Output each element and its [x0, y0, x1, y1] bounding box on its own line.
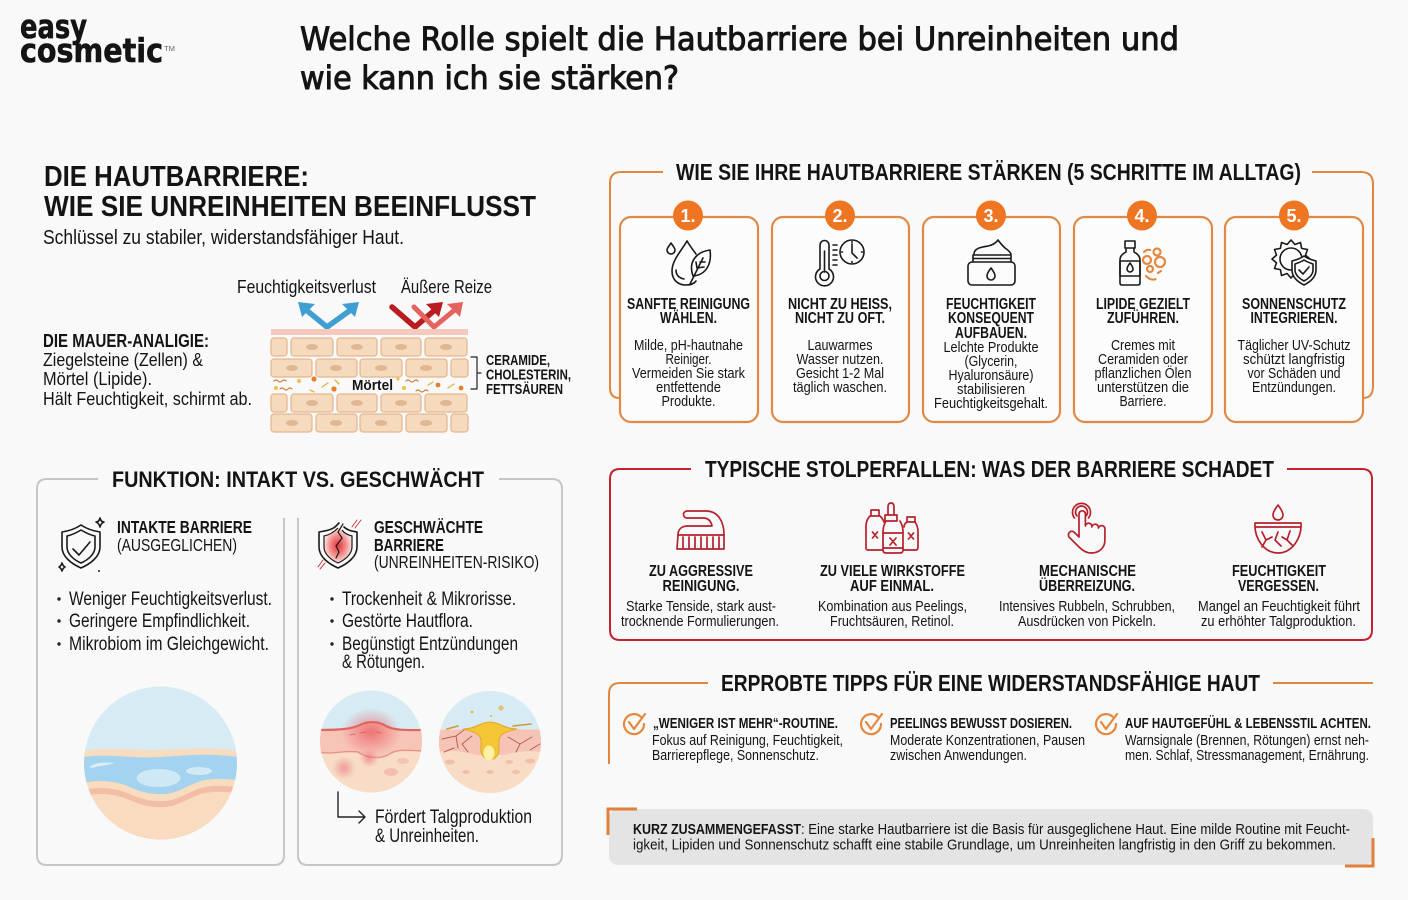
icon: bottles — [866, 503, 918, 553]
callout: kurz zusammengefasst — [608, 809, 1373, 866]
pitfall heading: VERGESSEN. — [1238, 578, 1319, 595]
step text: Ceramiden oder — [1098, 352, 1188, 368]
panel: erprobte tipps — [609, 670, 1373, 764]
icon: check — [624, 714, 645, 734]
icon: check — [1096, 714, 1117, 734]
icon: check — [861, 714, 882, 734]
step heading — [1242, 296, 1346, 327]
title: wie kann ich sie stärken? — [300, 59, 679, 97]
heading: damaged barrier — [374, 517, 539, 572]
pitfall text: Kombination aus Peelings, — [818, 599, 967, 615]
step text: stabilisieren — [957, 382, 1025, 398]
pitfall text: zu erhöhter Talgproduktion. — [1201, 614, 1356, 630]
label: lipids: CHOLESTERIN, — [486, 368, 571, 384]
card: step 1 — [620, 200, 758, 422]
pitfall heading: ZU VIELE WIRKSTOFFE — [820, 563, 965, 580]
icon: damaged shield — [318, 520, 361, 569]
icon: pressing finger — [1068, 503, 1105, 553]
label: lipids: FETTSÄUREN — [486, 381, 563, 398]
step text: Wasser nutzen. — [796, 352, 884, 368]
subtitle: Schlüssel zu stabiler, widerstandsfähiger Haut. — [43, 226, 404, 249]
icon: scrub brush — [677, 511, 724, 549]
text block: mauer-analogie: Hält Feuchtigkeit, schirmt ab. — [43, 388, 252, 409]
pitfall heading — [649, 563, 753, 595]
label: moertel: Mörtel — [352, 377, 393, 394]
logo: easy cosmetic — [20, 7, 175, 70]
panel: funktion intakt vs geschwaecht — [37, 467, 562, 865]
tip text — [890, 716, 1085, 764]
step text: Milde, pH-hautnahe — [634, 338, 743, 354]
step heading: SONNENSCHUTZ — [1242, 296, 1346, 313]
step heading: NICHT ZU HEISS, — [788, 296, 892, 313]
step text: unterstützen die — [1097, 380, 1189, 396]
panel: stolperfallen — [610, 456, 1372, 640]
card: step 3 — [923, 200, 1060, 422]
tip 2 — [861, 714, 1085, 764]
panel heading: WIE SIE IHRE HAUTBARRIERE STÄRKEN (5 SCHRITTE IM ALLTAG) — [676, 159, 1301, 185]
list: intact barrier: Weniger Feuchtigkeitsverlust. — [69, 589, 272, 610]
pitfall 2 — [818, 503, 967, 630]
illustration: sebum plug — [438, 690, 542, 794]
label: lipids: CERAMIDE, — [486, 353, 550, 369]
pitfall 1 — [621, 511, 779, 630]
step heading: SANFTE REINIGUNG — [627, 296, 750, 313]
panel heading: ERPROBTE TIPPS FÜR EINE WIDERSTANDSFÄHIGE HAUT — [721, 670, 1260, 696]
text block: mauer-analogie — [43, 330, 252, 409]
step text: vor Schäden und — [1248, 366, 1340, 382]
text: sebum result — [375, 807, 532, 847]
step text: Feuchtigkeitsgehalt. — [934, 396, 1048, 412]
pitfall text — [999, 599, 1175, 630]
step text — [1238, 338, 1350, 396]
icon: drop and leaf — [667, 241, 710, 285]
pitfall text — [818, 599, 967, 630]
icon: intact shield — [59, 518, 104, 572]
pitfall heading — [1039, 563, 1136, 595]
badge 1 — [673, 200, 703, 230]
panel heading: FUNKTION: INTAKT VS. GESCHWÄCHT — [112, 467, 484, 492]
text block: mauer-analogie: DIE MAUER-ANALIGIE: — [43, 330, 209, 351]
list: damaged barrier — [330, 589, 518, 673]
arrow: to sebum — [338, 792, 365, 823]
pitfall 3 — [999, 503, 1175, 630]
step heading — [788, 296, 892, 327]
title: Welche Rolle spielt die Hautbarriere bei Unreinheiten und — [300, 20, 1179, 58]
card: step 5 — [1225, 200, 1363, 422]
card: step 4 — [1074, 200, 1212, 422]
pitfall text: Mangel an Feuchtigkeit führt — [1198, 599, 1360, 615]
step text — [793, 338, 887, 396]
icon: dry skin bowl — [1255, 505, 1301, 553]
pitfall text — [1198, 599, 1360, 630]
pitfall heading: MECHANISCHE — [1039, 563, 1136, 580]
step text: Cremes mit — [1111, 338, 1175, 354]
step heading: WÄHLEN. — [660, 310, 717, 327]
heading: die hautbarriere: WIE SIE UNREINHEITEN BEEINFLUSST — [44, 191, 536, 223]
mortar lipids — [274, 376, 463, 392]
step text: Hyaluronsäure) — [948, 368, 1034, 384]
callout box — [609, 809, 1373, 865]
icon: bottle and lipids — [1120, 241, 1165, 285]
arrows: external irritants — [392, 302, 463, 327]
step text: Lauwarmes — [808, 338, 872, 354]
tip text: PEELINGS BEWUSST DOSIEREN. — [890, 716, 1072, 732]
label: lipids — [486, 353, 571, 398]
tip text — [652, 716, 843, 764]
icon: sun and shield — [1272, 240, 1316, 285]
step text: (Glycerin, — [964, 354, 1018, 370]
step text: Barriere. — [1120, 394, 1166, 410]
diagram: skin barrier wall — [237, 276, 571, 432]
panel: fuenf schritte — [610, 159, 1373, 422]
heading: intact barrier: INTAKTE BARRIERE — [117, 517, 252, 537]
heading: die hautbarriere: DIE HAUTBARRIERE: — [44, 161, 309, 193]
panel frame left — [37, 479, 284, 865]
heading: intact barrier: (AUSGEGLICHEN) — [117, 535, 237, 555]
step text: Gesicht 1-2 Mal — [796, 366, 884, 382]
step text: schützt langfristig — [1243, 352, 1345, 368]
step text — [1094, 338, 1192, 410]
card: step 2 — [772, 200, 909, 422]
tip text: „WENIGER IST MEHR“-ROUTINE. — [653, 716, 838, 732]
pitfall text: Fruchtsäuren, Retinol. — [830, 614, 954, 630]
icon: cream jar — [968, 240, 1015, 285]
step text: Reiniger. — [666, 352, 712, 368]
step heading: FEUCHTIGKEIT — [946, 296, 1036, 313]
list: damaged barrier: Gestörte Hautflora. — [342, 611, 473, 632]
tip text: zwischen Anwendungen. — [890, 748, 1027, 764]
badge 2: 2. — [832, 206, 848, 226]
callout text: : Eine starke Hautbarriere ist die Basis für ausgeglichene Haut. Eine milde Routine mit Feucht- — [801, 822, 1350, 838]
text: sebum result: Fördert Talgproduktion — [375, 807, 532, 828]
pitfall text: Ausdrücken von Pickeln. — [1018, 614, 1156, 630]
list: intact barrier: Mikrobiom im Gleichgewicht. — [69, 634, 269, 655]
tip text: men. Schlaf, Stressmanagement, Ernährung. — [1125, 748, 1369, 764]
panel frame — [609, 683, 1373, 764]
pitfall text: trocknende Formulierungen. — [621, 614, 779, 630]
callout text: KURZ ZUSAMMENGEFASST — [633, 822, 801, 838]
pitfall heading: REINIGUNG. — [662, 578, 740, 595]
label: feuchtigkeitsverlust: Feuchtigkeitsverlust — [237, 276, 376, 297]
step text: Täglicher UV-Schutz — [1238, 338, 1350, 354]
logo: easy cosmetic: TM — [164, 46, 175, 53]
step heading — [1096, 296, 1190, 327]
illustration: inflamed skin — [319, 690, 423, 794]
icon: thermometer and clock — [816, 240, 864, 286]
heading: damaged barrier: (UNREINHEITEN-RISIKO) — [374, 552, 539, 572]
list: damaged barrier: Begünstigt Entzündungen — [342, 634, 518, 655]
step heading: AUFBAUEN. — [955, 325, 1027, 342]
step text — [632, 338, 746, 410]
corner accents — [608, 809, 1373, 866]
step text: pflanzlichen Ölen — [1094, 364, 1192, 382]
text: sebum result: & Unreinheiten. — [375, 826, 479, 847]
badge 1: 1. — [680, 206, 696, 226]
panel frame — [610, 469, 1372, 640]
callout text — [633, 822, 1350, 854]
tip text: Warnsignale (Brennen, Rötungen) ernst neh- — [1125, 733, 1369, 749]
step text: entfettende — [656, 380, 721, 396]
arrows: moisture loss — [298, 302, 359, 327]
text block: mauer-analogie: Mörtel (Lipide). — [43, 368, 152, 389]
step text: täglich waschen. — [793, 380, 887, 396]
step heading: NICHT ZU OFT. — [795, 310, 885, 327]
bricks — [271, 338, 468, 432]
pitfall heading: AUF EINMAL. — [850, 578, 934, 595]
heading: die hautbarriere — [44, 161, 536, 223]
step text: Vermeiden Sie stark — [632, 366, 746, 382]
pitfall 4 — [1198, 505, 1360, 630]
tip text: Fokus auf Reinigung, Feuchtigkeit, — [652, 733, 843, 749]
pitfall heading — [820, 563, 965, 595]
badge 4: 4. — [1134, 206, 1150, 226]
step text: Entzündungen. — [1252, 380, 1336, 396]
step heading: KONSEQUENT — [948, 310, 1034, 327]
label: aeussere reize: Äußere Reize — [401, 276, 492, 297]
badge 3: 3. — [983, 206, 999, 226]
step heading: ZUFÜHREN. — [1107, 310, 1179, 327]
panel frame — [610, 172, 1373, 398]
heading: damaged barrier: GESCHWÄCHTE — [374, 517, 483, 537]
text block: mauer-analogie: Ziegelsteine (Zellen) & — [43, 349, 204, 370]
logo: easy cosmetic: cosmetic — [20, 31, 163, 70]
heading: intact barrier — [117, 517, 252, 555]
pitfall heading: ÜBERREIZUNG. — [1039, 576, 1135, 595]
skin surface band — [271, 329, 468, 335]
step heading — [627, 296, 750, 327]
tip 3 — [1096, 714, 1371, 764]
panel frame right — [298, 479, 562, 865]
heading: damaged barrier: BARRIERE — [374, 535, 444, 555]
badge 5 — [1279, 200, 1309, 230]
list: intact barrier — [57, 589, 272, 655]
illustration: healthy skin — [84, 686, 238, 840]
bracket — [471, 357, 481, 389]
tip text: Moderate Konzentrationen, Pausen — [890, 733, 1085, 749]
list: intact barrier: Geringere Empfindlichkeit. — [69, 611, 250, 632]
badge 3 — [976, 200, 1006, 230]
badge 4 — [1127, 200, 1157, 230]
title — [300, 20, 1179, 97]
list: damaged barrier: & Rötungen. — [342, 652, 425, 673]
pitfall text: Intensives Rubbeln, Schrubben, — [999, 599, 1175, 615]
step heading — [946, 296, 1036, 342]
pitfall heading — [1232, 563, 1326, 595]
pitfall heading: ZU AGGRESSIVE — [649, 563, 753, 580]
tip text: Barrierepflege, Sonnenschutz. — [652, 748, 819, 764]
step heading: LIPIDE GEZIELT — [1096, 296, 1190, 313]
pitfall heading: FEUCHTIGKEIT — [1232, 563, 1326, 580]
tip text — [1125, 715, 1371, 764]
badge 2 — [825, 200, 855, 230]
step text — [934, 340, 1048, 412]
panel heading: TYPISCHE STOLPERFALLEN: WAS DER BARRIERE SCHADET — [705, 456, 1274, 482]
step text: Produkte. — [662, 394, 716, 410]
callout text: igkeit, Lipiden und Sonnenschutz schafft eine stabile Grundlage, um Unreinheiten langfristig in den Griff zu bekommen. — [633, 838, 1336, 854]
step text: Lelchte Produkte — [944, 340, 1038, 356]
tip 1 — [624, 714, 843, 764]
badge 5: 5. — [1286, 206, 1302, 226]
list: damaged barrier: Trockenheit & Mikrorisse. — [342, 589, 516, 610]
pitfall text — [621, 599, 779, 630]
step heading: INTEGRIEREN. — [1250, 310, 1338, 327]
pitfall text: Starke Tenside, stark aust- — [626, 599, 776, 615]
logo: easy cosmetic: easy — [20, 7, 87, 46]
